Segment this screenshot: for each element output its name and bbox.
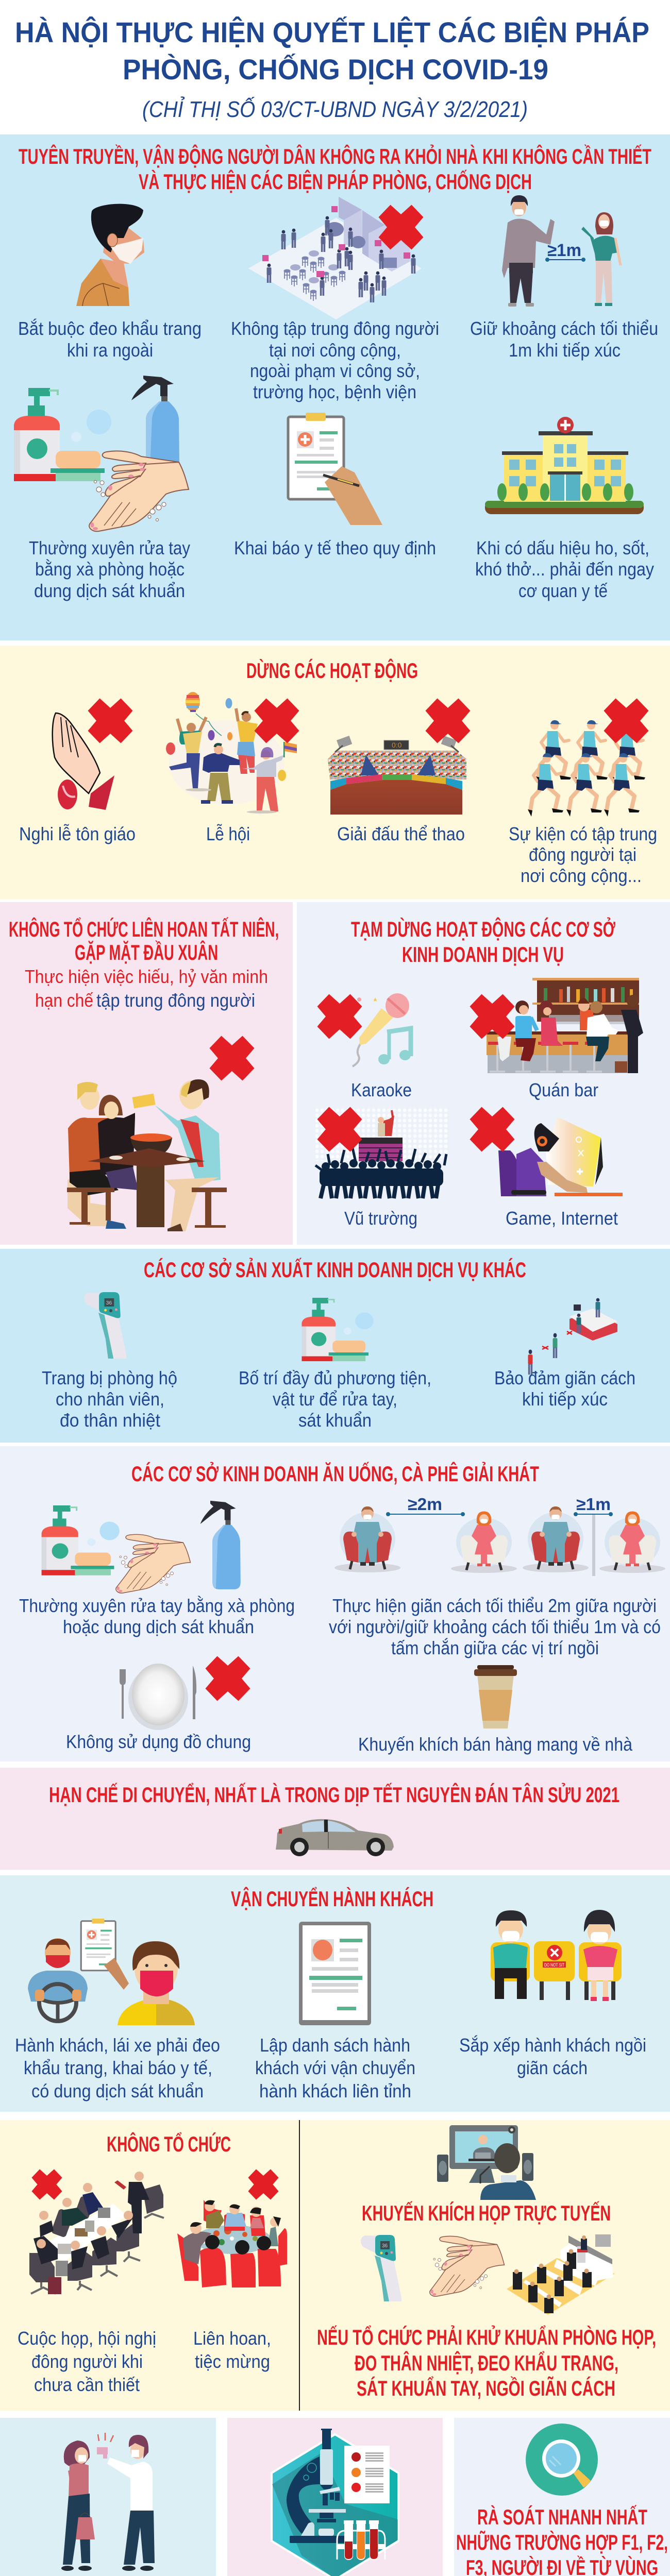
icon: spaced seating: DO NOT SIT bbox=[544, 1962, 564, 1968]
icon: man wearing mask bbox=[76, 204, 144, 306]
captions: giãn cách bbox=[517, 2057, 588, 2078]
captions: trường học, bệnh viện bbox=[253, 381, 416, 402]
captions: ngoài phạm vi công sở, bbox=[250, 360, 420, 381]
captions: cơ quan y tế bbox=[518, 580, 608, 601]
panel: vận chuyển hành khách bbox=[0, 1875, 670, 2112]
icon: queue at counter bbox=[528, 1298, 617, 1375]
icon: keep 1m distance: ≥1m bbox=[547, 241, 581, 260]
title block: PHÒNG, CHỐNG DỊCH COVID-19 bbox=[123, 53, 548, 86]
captions: khách với vận chuyển bbox=[255, 2057, 415, 2078]
heading: không tổ chức: KHÔNG TỔ CHỨC bbox=[107, 2131, 231, 2156]
cross marks bbox=[317, 994, 514, 1152]
icon: medical declaration form bbox=[288, 413, 382, 525]
icon: microscope and test tubes bbox=[272, 2429, 398, 2576]
icon: stadium: 0:0 bbox=[392, 741, 402, 749]
cross marks bbox=[88, 699, 648, 743]
heading: nếu tổ chức bbox=[317, 2324, 656, 2400]
captions: Khai báo y tế theo quy định bbox=[234, 537, 436, 558]
icon: washing hands bbox=[430, 2236, 504, 2296]
captions: Bố trí đầy đủ phương tiện, bbox=[239, 1367, 431, 1388]
captions: tấm chắn giữa các vị trí ngồi bbox=[391, 1637, 599, 1658]
captions: hành khách liên tỉnh bbox=[259, 2080, 411, 2102]
captions: đông người khi bbox=[31, 2351, 143, 2372]
icon: bar counter bbox=[487, 978, 643, 1073]
text bbox=[456, 2505, 668, 2576]
captions: đo thân nhiệt bbox=[60, 1410, 160, 1431]
captions: Karaoke bbox=[351, 1079, 412, 1100]
captions: 1m khi tiếp xúc bbox=[509, 340, 621, 361]
captions: Bảo đảm giãn cách bbox=[494, 1367, 635, 1388]
panel: duy trì tổ giám sát bbox=[0, 2418, 216, 2576]
captions: tại nơi công cộng, bbox=[269, 340, 401, 361]
captions: cho nhân viên, bbox=[56, 1388, 164, 1410]
captions: Hành khách, lái xe phải đeo bbox=[15, 2035, 220, 2056]
captions: có dung dịch sát khuẩn bbox=[31, 2080, 204, 2102]
captions: khó thở... phải đến ngay bbox=[475, 558, 654, 580]
icon: thermometer bbox=[84, 1292, 126, 1359]
captions: Thường xuyên rửa tay bbox=[29, 537, 190, 558]
icon: seating distance: ≥1m bbox=[576, 1495, 611, 1514]
captions: Khuyến khích bán hàng mang về nhà bbox=[358, 1734, 633, 1755]
captions: sát khuẩn bbox=[298, 1410, 372, 1431]
captions: vật tư để rửa tay, bbox=[273, 1388, 397, 1410]
captions: bằng xà phòng hoặc bbox=[35, 558, 185, 580]
icon: crowd at public event with cross bbox=[248, 197, 424, 319]
icon: karaoke microphone bbox=[353, 993, 411, 1066]
title block: (CHỈ THỊ SỐ 03/CT-UBND NGÀY 3/2/2021) bbox=[142, 96, 528, 122]
heading: DỪNG CÁC HOẠT ĐỘNG bbox=[246, 658, 418, 683]
captions: Bắt buộc đeo khẩu trang bbox=[18, 318, 202, 339]
icon: banquet bbox=[177, 2200, 287, 2287]
icon: soap and sanitizer bbox=[301, 1298, 374, 1361]
icon: stadium bbox=[328, 736, 466, 815]
captions bbox=[19, 823, 657, 886]
subtext: hạn chế bbox=[35, 990, 93, 1011]
icon: dance club bbox=[315, 1107, 448, 1198]
heading: VẬN CHUYỂN HÀNH KHÁCH bbox=[231, 1886, 433, 1911]
captions: Sắp xếp hành khách ngồi bbox=[459, 2035, 646, 2056]
subtext: Thực hiện việc hiếu, hỷ văn minh bbox=[25, 966, 268, 987]
heading: KHÔNG TỔ CHỨC LIÊN HOAN TẤT NIÊN, bbox=[9, 916, 279, 941]
title block bbox=[15, 16, 649, 122]
captions: dung dịch sát khuẩn bbox=[34, 580, 185, 601]
icon: keep 1m distance bbox=[502, 195, 621, 307]
panel: xét nghiệm bbox=[227, 2418, 443, 2576]
icon: meeting room bbox=[29, 2172, 164, 2294]
icon: online meeting bbox=[437, 2125, 536, 2200]
icon: soap, hand washing and spray bbox=[42, 1501, 241, 1593]
captions bbox=[344, 1079, 618, 1229]
icon: plate and cutlery with cross bbox=[120, 1656, 250, 1730]
panel: hạn chế di chuyển bbox=[0, 1768, 670, 1870]
icon: festival people bbox=[166, 692, 297, 814]
captions bbox=[18, 318, 658, 601]
icon: driver, clipboard and masked passenger bbox=[28, 1919, 195, 2025]
panel: dừng các hoạt động bbox=[0, 646, 670, 899]
icon: soap, spray bottle and washing hands bbox=[14, 376, 189, 531]
captions: Không tập trung đông người bbox=[231, 318, 439, 339]
captions: khẩu trang, khai báo y tế, bbox=[24, 2057, 212, 2078]
panel: không tổ chức / khuyến khích họp trực tuyến bbox=[0, 2120, 670, 2411]
captions bbox=[19, 1595, 661, 1755]
captions bbox=[18, 2328, 271, 2395]
icon: people drinking at a table bbox=[67, 1079, 227, 1231]
icon: seating distance bbox=[334, 1495, 665, 1576]
panel: tạm dừng cơ sở dịch vụ bbox=[297, 902, 670, 1245]
heading: KINH DOANH DỊCH VỤ bbox=[402, 942, 564, 967]
panel: không tổ chức liên hoan bbox=[0, 902, 293, 1245]
captions: Trang bị phòng hộ bbox=[42, 1367, 177, 1388]
captions bbox=[42, 1367, 635, 1431]
icon: car bbox=[276, 1819, 394, 1856]
icon: runners bbox=[528, 720, 645, 817]
panel: rà soát bbox=[454, 2418, 670, 2576]
subtext bbox=[25, 966, 268, 1011]
captions: hoặc dung dịch sát khuẩn bbox=[63, 1616, 254, 1637]
panel: ăn uống, cà phê giải khát bbox=[0, 1446, 670, 1761]
subtext: tập trung đông người bbox=[96, 990, 255, 1011]
captions: Cuộc họp, hội nghị bbox=[18, 2328, 156, 2349]
icon: thermometer bbox=[361, 2235, 401, 2301]
panel: các cơ sở sản xuất kinh doanh bbox=[0, 1249, 670, 1443]
captions bbox=[15, 2035, 646, 2102]
captions: Liên hoan, bbox=[193, 2328, 271, 2349]
panel: tuyên truyền bbox=[0, 134, 670, 640]
captions: Vũ trường bbox=[344, 1208, 417, 1229]
captions: chưa cần thiết bbox=[34, 2374, 140, 2395]
icon: conference room bbox=[507, 2234, 615, 2315]
captions: khi tiếp xúc bbox=[522, 1388, 608, 1410]
icon: magnifier bbox=[526, 2424, 598, 2496]
icon: tablet passenger list bbox=[299, 1922, 371, 2025]
icon: takeaway coffee cup bbox=[474, 1665, 517, 1728]
icon: cross bbox=[209, 1036, 255, 1081]
captions: tiệc mừng bbox=[195, 2351, 270, 2372]
icon: seating distance: ≥2m bbox=[408, 1495, 442, 1514]
captions: Khi có dấu hiệu ho, sốt, bbox=[476, 537, 649, 558]
captions: khi ra ngoài bbox=[67, 340, 153, 361]
icon: temperature check bbox=[61, 2433, 155, 2571]
icon: gamer at computer bbox=[498, 1117, 623, 1196]
captions: Quán bar bbox=[529, 1079, 598, 1100]
heading bbox=[19, 144, 651, 194]
captions: Thường xuyên rửa tay bằng xà phòng bbox=[19, 1595, 295, 1616]
heading bbox=[351, 917, 615, 967]
icon: hospital bbox=[485, 417, 644, 514]
captions: đông người tại bbox=[529, 844, 636, 865]
captions: Không sử dụng đồ chung bbox=[66, 1731, 251, 1752]
heading: GẶP MẶT ĐẦU XUÂN bbox=[75, 940, 218, 964]
captions: Nghi lễ tôn giáo bbox=[19, 823, 136, 844]
captions: Giải đấu thể thao bbox=[337, 823, 465, 844]
cross marks bbox=[31, 2169, 279, 2200]
icon: praying hands bbox=[53, 713, 114, 810]
captions: Lập danh sách hành bbox=[260, 2035, 410, 2056]
captions: Game, Internet bbox=[506, 1208, 618, 1229]
heading bbox=[9, 916, 279, 964]
icon: spaced seating bbox=[491, 1910, 622, 2001]
captions: Lễ hội bbox=[206, 823, 250, 844]
captions: nơi công cộng... bbox=[521, 865, 642, 886]
